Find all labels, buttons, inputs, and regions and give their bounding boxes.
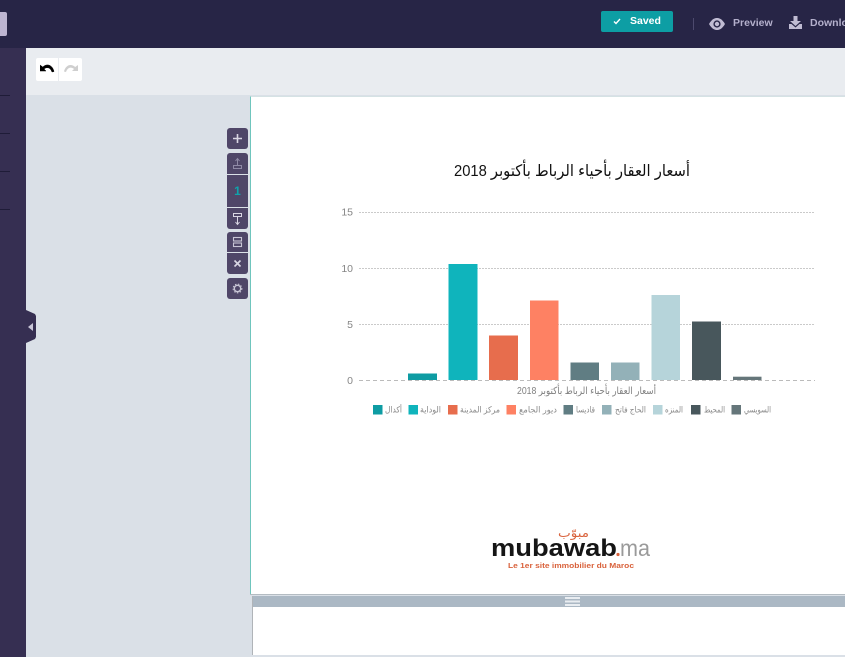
- logo tab: [0, 12, 7, 36]
- legend: الحاج فاتح: [615, 404, 646, 414]
- undo redo toolbar: [26, 48, 845, 95]
- logo wordmark: mubawab: [491, 535, 617, 562]
- legend: المحيط: [704, 404, 725, 414]
- sidebar collapse handle: [26, 310, 36, 343]
- legend: السويسي: [744, 404, 771, 414]
- legend: ديور الجامع: [519, 404, 557, 414]
- saved button: [601, 11, 673, 32]
- y axis labels: 15: [341, 206, 353, 218]
- y axis labels: [341, 206, 353, 387]
- bars: [408, 264, 762, 380]
- legend: المنزه: [665, 404, 683, 414]
- move down button: [227, 208, 248, 229]
- row controls: [227, 128, 248, 299]
- legend: مركز المدينة: [460, 404, 500, 414]
- saved button: Saved: [630, 15, 661, 27]
- redo button: [59, 58, 82, 81]
- icon: download: [789, 16, 802, 29]
- chart title: أسعار العقار بأحياء الرباط بأكتوبر 2018: [454, 159, 690, 181]
- logo tagline: Le 1er site immobilier du Maroc: [508, 561, 634, 570]
- icon: drag lines: [565, 597, 580, 606]
- x axis title: أسعار العقار بأحياء الرباط بأكتوبر 2018: [517, 383, 656, 397]
- y axis labels: 5: [347, 319, 353, 331]
- row number: 1: [234, 184, 241, 198]
- legend: [373, 404, 771, 414]
- y axis labels: 0: [347, 375, 353, 387]
- delete button: [227, 253, 248, 274]
- row resize handle: [253, 596, 845, 607]
- legend: أكدال: [385, 404, 402, 414]
- y axis labels: 10: [341, 263, 353, 275]
- second page row: [252, 596, 845, 655]
- preview link: Preview: [733, 17, 773, 29]
- undo button: [36, 58, 58, 81]
- bar chart: [341, 206, 815, 415]
- page panel: [250, 96, 845, 594]
- move up button: [227, 153, 248, 174]
- legend: قاديسا: [576, 404, 595, 414]
- left sidebar: [0, 48, 26, 657]
- legend: الوداية: [420, 404, 441, 414]
- top navigation bar: [0, 0, 845, 48]
- row number: [227, 175, 248, 207]
- mubawab logo: [491, 526, 650, 570]
- separator: [693, 18, 694, 30]
- settings button: [227, 278, 248, 299]
- page divider: [250, 594, 845, 595]
- add button: [227, 128, 248, 149]
- layout button: [227, 232, 248, 252]
- arabic logo word: مبوّب: [558, 526, 589, 541]
- icon: eye: [709, 18, 725, 30]
- mubawab logo: ma: [620, 535, 650, 561]
